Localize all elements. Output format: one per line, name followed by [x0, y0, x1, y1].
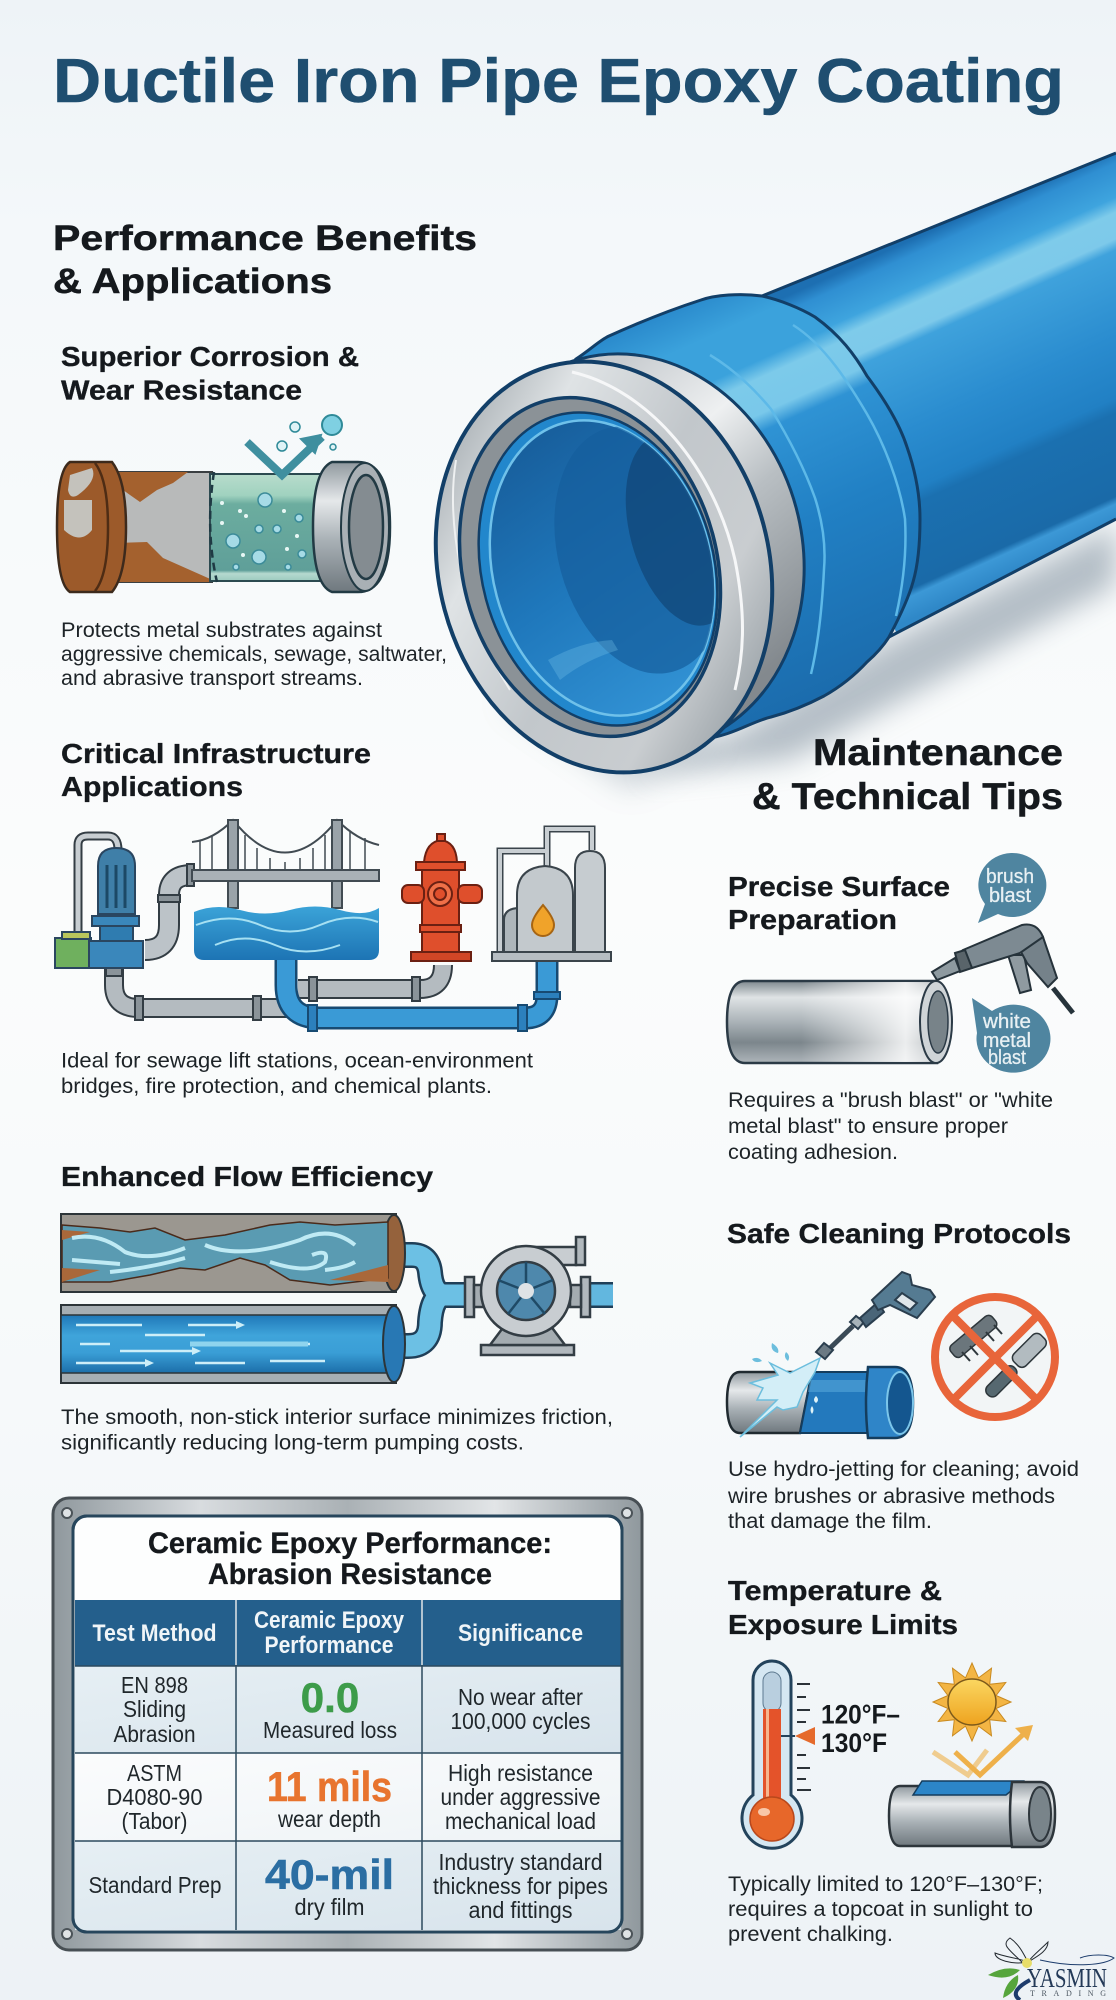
description: aggressive chemicals, sewage, saltwater,: [61, 643, 447, 666]
icon: blasted metal pipe: [727, 981, 952, 1063]
table row: ASTM D4080-90: High resistance: [448, 1760, 593, 1786]
callout: brush blast: brush: [986, 866, 1034, 888]
table row: ASTM D4080-90: (Tabor): [122, 1808, 188, 1834]
table title: Ceramic Epoxy Performance:: [148, 1527, 552, 1560]
table title: [148, 1527, 552, 1591]
panel: temperature and exposure limits: [728, 1575, 1055, 1946]
panel: enhanced flow efficiency: [61, 1161, 613, 1454]
table row: ASTM D4080-90: wear depth: [277, 1806, 381, 1832]
heading: Temperature &: [728, 1575, 942, 1606]
metal frame: [53, 1498, 642, 1950]
callout: white metal blast: white: [982, 1011, 1031, 1033]
description: [61, 1406, 613, 1454]
description: wire brushes or abrasive methods: [727, 1485, 1055, 1508]
icon: pipe with topcoat: [889, 1781, 1055, 1847]
temperature label: 130°F: [821, 1728, 887, 1758]
section heading: performance benefits: & Applications: [53, 262, 332, 301]
callout: white metal blast: metal: [983, 1030, 1031, 1052]
callout: white metal blast: [972, 998, 1050, 1073]
table row: ASTM D4080-90: 11 mils: [267, 1763, 392, 1810]
description: bridges, fire protection, and chemical plants.: [61, 1075, 492, 1098]
icon: suspension bridge: [192, 820, 379, 908]
table row: EN 898: EN 898: [121, 1672, 188, 1698]
panel: ceramic epoxy performance table: [53, 1498, 642, 1950]
description: Use hydro-jetting for cleaning; avoid: [728, 1458, 1079, 1481]
icon: pressure washer gun: [816, 1272, 935, 1359]
table row: Standard Prep: thickness for pipes: [433, 1873, 608, 1899]
connecting pipes: [395, 1255, 613, 1346]
heading: Superior Corrosion &: [61, 341, 359, 372]
hero illustration: blue epoxy-coated pipe: [391, 153, 1116, 811]
table row: ASTM D4080-90: ASTM: [127, 1760, 182, 1786]
logo: Yasmin Trading: [988, 1938, 1114, 2000]
temperature label: [821, 1700, 900, 1758]
table row: EN 898: Abrasion: [114, 1721, 196, 1747]
table row: ASTM D4080-90: D4080-90: [106, 1784, 202, 1810]
description: Protects metal substrates against: [61, 619, 382, 642]
icon: no wire brushes sign: [935, 1297, 1055, 1417]
icon: fire hydrant: [402, 834, 482, 961]
section heading: performance benefits: Performance Benefits: [53, 219, 477, 258]
arrow: reflected sunlight: [933, 1725, 1033, 1775]
description: Requires a "brush blast" or "white: [728, 1089, 1053, 1112]
callout: brush blast: blast: [989, 885, 1031, 907]
description: that damage the film.: [728, 1510, 932, 1533]
callout: white metal blast: blast: [988, 1047, 1026, 1069]
temperature label: 120°F–: [821, 1700, 900, 1730]
heading: Applications: [61, 771, 243, 802]
heading: Wear Resistance: [61, 374, 302, 406]
table row: ASTM D4080-90: under aggressive: [440, 1784, 600, 1810]
description: prevent chalking.: [728, 1923, 893, 1946]
heading: Critical Infrastructure: [61, 738, 371, 769]
title: Ductile Iron Pipe Epoxy Coating: [53, 47, 1064, 116]
panel: safe cleaning protocols: [727, 1218, 1079, 1533]
panel: corrosion and wear resistance: [57, 341, 447, 690]
icon: corroded pipe turning to coated pipe: [57, 415, 390, 592]
description: significantly reducing long-term pumping costs.: [61, 1432, 524, 1454]
illustration: rough vs smooth pipe with pump: [61, 1214, 613, 1383]
rough corroded pipe: [61, 1214, 405, 1292]
callout: brush blast: [978, 853, 1046, 923]
table row: Standard Prep: 40-mil: [265, 1851, 394, 1898]
heading: Preparation: [728, 904, 897, 935]
icon: chemical plant: [492, 829, 611, 961]
description: requires a topcoat in sunlight to: [728, 1898, 1033, 1921]
table row: EN 898: No wear after: [458, 1684, 583, 1710]
logo: Yasmin Trading: TRADING: [1030, 1989, 1106, 1998]
section heading: maintenance and technical tips: [752, 732, 1063, 817]
heading: [728, 1575, 958, 1640]
heading: Enhanced Flow Efficiency: [61, 1161, 433, 1192]
heading: Exposure Limits: [728, 1609, 958, 1640]
table row: EN 898: 100,000 cycles: [450, 1708, 590, 1734]
icon: sun: [933, 1663, 1011, 1741]
table header: [75, 1600, 621, 1666]
panel: precise surface preparation: [727, 853, 1073, 1164]
grey piping: [78, 836, 547, 1018]
icon: water tank: [194, 906, 379, 960]
description: [61, 619, 447, 690]
table header: Performance: [264, 1632, 394, 1659]
table row: ASTM D4080-90: mechanical load: [445, 1808, 596, 1834]
panel: critical infrastructure applications: [55, 738, 611, 1098]
table row: EN 898: Measured loss: [263, 1717, 397, 1743]
description: Typically limited to 120°F–130°F;: [728, 1873, 1043, 1896]
table title: Abrasion Resistance: [208, 1558, 492, 1591]
icon: blast gun: [932, 924, 1073, 1013]
icon: centrifugal pump: [465, 1237, 590, 1355]
description: The smooth, non-stick interior surface minimizes friction,: [61, 1406, 613, 1429]
description: [728, 1089, 1053, 1164]
section heading: performance benefits: [53, 219, 477, 301]
illustration: pipe network: [55, 820, 611, 1031]
description: [727, 1458, 1079, 1533]
section heading: maintenance and technical tips: Maintenance: [813, 732, 1063, 773]
description: Ideal for sewage lift stations, ocean-environment: [61, 1050, 533, 1072]
heading: [61, 341, 359, 406]
section heading: maintenance and technical tips: & Technical Tips: [752, 776, 1063, 817]
description: [728, 1873, 1043, 1946]
table header: Test Method: [92, 1620, 216, 1647]
description: coating adhesion.: [728, 1141, 898, 1164]
description: [61, 1050, 533, 1098]
table row: Standard Prep: [75, 1841, 621, 1930]
table row: EN 898: Sliding: [123, 1696, 186, 1722]
icon: submersible pump: [55, 848, 143, 968]
table header: Significance: [458, 1620, 583, 1647]
description: and abrasive transport streams.: [61, 667, 363, 690]
table row: Standard Prep: Standard Prep: [88, 1872, 222, 1898]
table header: Ceramic Epoxy: [254, 1607, 405, 1634]
icon: hydro-jetted pipe: [727, 1343, 913, 1438]
heading: Precise Surface: [728, 871, 950, 902]
table row: EN 898: [75, 1666, 621, 1753]
table row: Standard Prep: dry film: [294, 1894, 364, 1920]
table row: EN 898: 0.0: [301, 1674, 359, 1721]
table row: Standard Prep: Industry standard: [438, 1849, 602, 1875]
heading: Safe Cleaning Protocols: [727, 1218, 1071, 1249]
smooth coated pipe: [61, 1305, 405, 1383]
table row: ASTM D4080-90: [75, 1753, 621, 1841]
table row: Standard Prep: and fittings: [468, 1897, 572, 1923]
heading: [61, 738, 371, 802]
heading: [728, 871, 950, 935]
icon: thermometer: [742, 1661, 815, 1848]
description: metal blast" to ensure proper: [728, 1115, 1008, 1138]
